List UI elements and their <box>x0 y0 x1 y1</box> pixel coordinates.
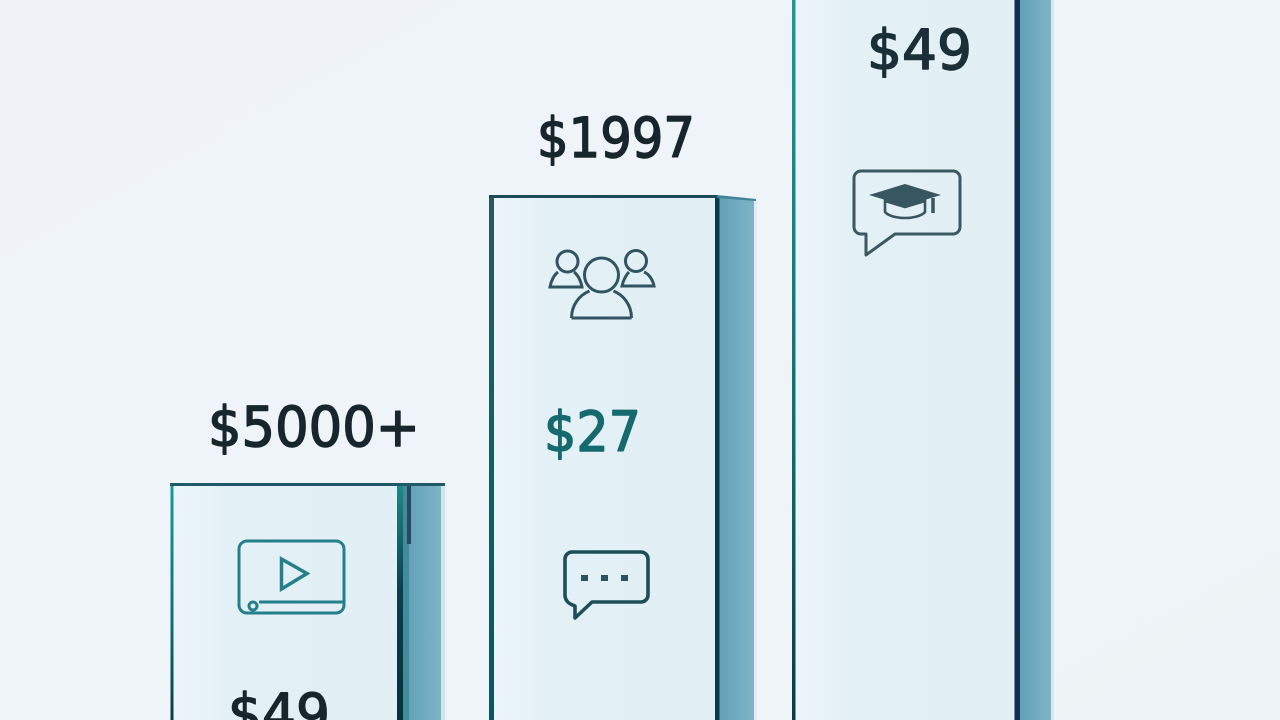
icon: three people group <box>550 250 654 318</box>
price: $49 in bar 3: $49 <box>867 18 972 82</box>
bar 3: top tier <box>792 0 1054 720</box>
label: $1997: $1997 <box>537 106 695 170</box>
bar 3 front face <box>793 0 1018 720</box>
price: $27 in bar 2: $27 <box>544 400 641 464</box>
bar 3 side face <box>1018 0 1053 720</box>
bar 2 front face <box>490 197 717 720</box>
icon: video player <box>239 541 344 613</box>
label: $5000+: $5000+ <box>208 395 420 459</box>
bar 1 front face <box>172 485 403 720</box>
bar 2 side face <box>717 196 756 720</box>
icon: chat bubble with dots <box>565 552 648 618</box>
icon: graduation cap in speech bubble <box>854 171 960 255</box>
bar 2: $1997 tier <box>489 195 757 720</box>
bar 1 side face <box>403 484 445 720</box>
bar 1: $5000+ tier <box>170 483 445 720</box>
